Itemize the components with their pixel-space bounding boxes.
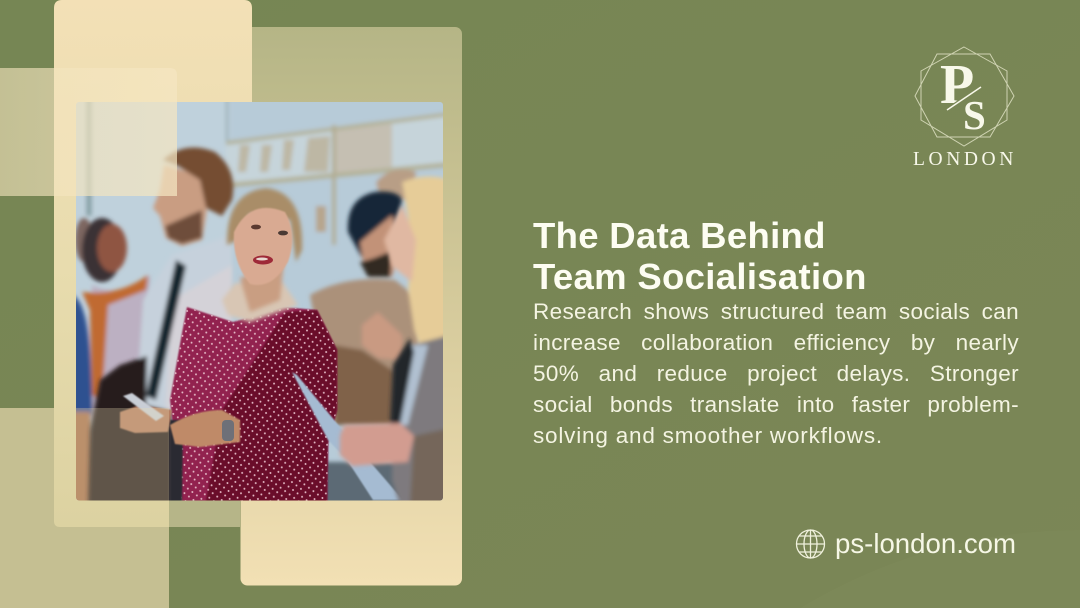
man with turban bbox=[310, 192, 420, 506]
heading: Team Socialisation bbox=[533, 256, 867, 297]
photo backdrop bbox=[70, 96, 450, 506]
woman in red dress bbox=[120, 188, 337, 506]
bottom translucent strip bbox=[169, 500, 240, 527]
logo wordmark: LONDON bbox=[913, 149, 1017, 170]
body text: increase collaboration efficiency by nearly bbox=[533, 330, 1019, 355]
man with tie bbox=[88, 148, 233, 506]
website address: ps-london.com bbox=[835, 528, 1016, 559]
body text: social bonds translate into faster problem- bbox=[533, 392, 1019, 417]
woman at left bbox=[70, 218, 150, 506]
blonde woman bbox=[340, 176, 450, 506]
heading bbox=[533, 215, 867, 297]
body text: solving and smoother workflows. bbox=[533, 423, 883, 448]
panel: translucent square top left bbox=[0, 68, 177, 196]
logo: PS London bbox=[913, 47, 1017, 170]
photo tint bottom left bbox=[76, 408, 169, 500]
body text bbox=[533, 299, 1019, 448]
logo monogram: P bbox=[940, 54, 974, 116]
body text: Research shows structured team socials can bbox=[533, 299, 1019, 324]
heading: The Data Behind bbox=[533, 215, 826, 256]
logo monogram bbox=[940, 54, 986, 138]
photo: team socialising bbox=[70, 96, 450, 506]
body text: 50% and reduce project delays. Stronger bbox=[533, 361, 1019, 386]
document held bbox=[292, 372, 403, 500]
panel: front rectangle top bbox=[54, 0, 252, 527]
logo monogram: S bbox=[963, 92, 986, 138]
logo emblem bbox=[915, 47, 1014, 146]
icon: globe bbox=[796, 530, 824, 558]
panel: back rectangle right bbox=[240, 27, 462, 586]
panel: translucent square bottom left bbox=[0, 408, 169, 608]
